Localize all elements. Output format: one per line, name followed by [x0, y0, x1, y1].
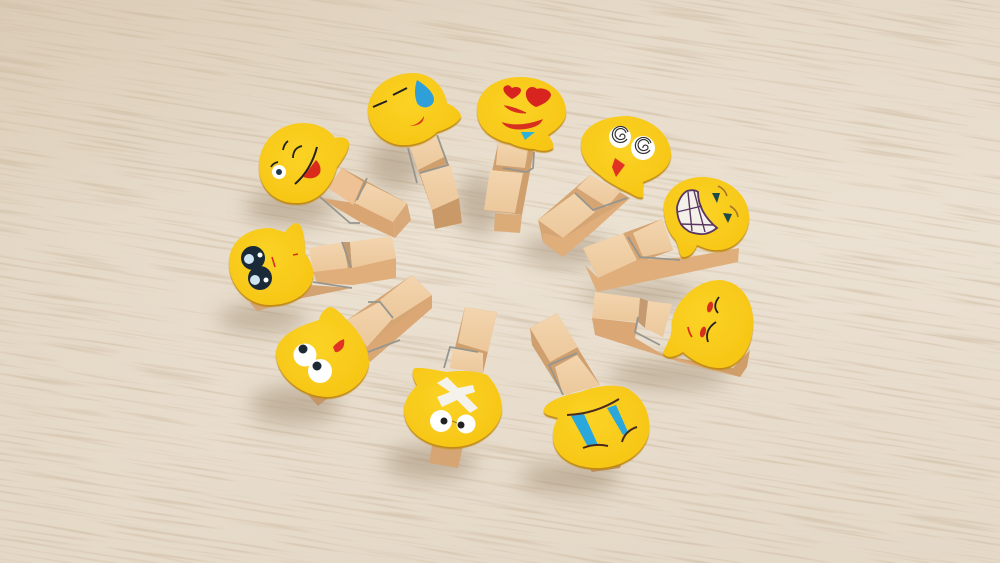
face 4 features — [609, 126, 655, 177]
pin body 2 — [408, 135, 462, 229]
face 6 — [663, 280, 753, 368]
face 1 features — [271, 141, 320, 184]
face 2 features — [373, 80, 434, 126]
pin body 10 — [250, 236, 396, 311]
pin body 3 — [484, 143, 534, 233]
clothespin 10: big eyes face — [229, 223, 396, 311]
face 9 features — [294, 339, 344, 383]
clothespin 6: sleepy blush face — [592, 280, 753, 377]
face 7 features — [567, 399, 637, 448]
face 4 — [581, 116, 671, 198]
pin body 9 — [308, 275, 432, 406]
clothespin 8: bandage face — [404, 307, 502, 468]
pin body 5 — [583, 219, 739, 292]
face 10 features — [241, 246, 298, 290]
pin body 4 — [538, 175, 630, 257]
pin body 7 — [530, 313, 625, 472]
clothespin 3: heart eyes face — [477, 77, 566, 233]
face 7 — [544, 386, 649, 468]
face 6 features — [688, 297, 719, 342]
face 8 features — [430, 377, 478, 434]
clothespin 7: crying face — [530, 313, 649, 472]
pin body 8 — [429, 307, 497, 468]
face 8 — [404, 368, 502, 447]
clothespin 5: grin face — [583, 177, 749, 292]
face 5 features — [677, 186, 738, 234]
face 1 — [259, 123, 349, 203]
clothespin 4: dizzy face — [538, 116, 671, 257]
clothespin 9: surprised face — [276, 275, 432, 406]
cast shadows — [217, 140, 730, 494]
pin body 1 — [320, 168, 411, 238]
face 10 — [229, 223, 313, 305]
face 3 features — [503, 85, 551, 140]
clothespin 2: sweat drop face — [368, 73, 462, 229]
pin body 6 — [592, 292, 750, 377]
face 5 — [664, 177, 749, 257]
face 3 — [477, 77, 566, 151]
face 2 — [368, 73, 461, 145]
face 9 — [276, 307, 369, 397]
clothespin 1: tongue face — [259, 123, 411, 238]
